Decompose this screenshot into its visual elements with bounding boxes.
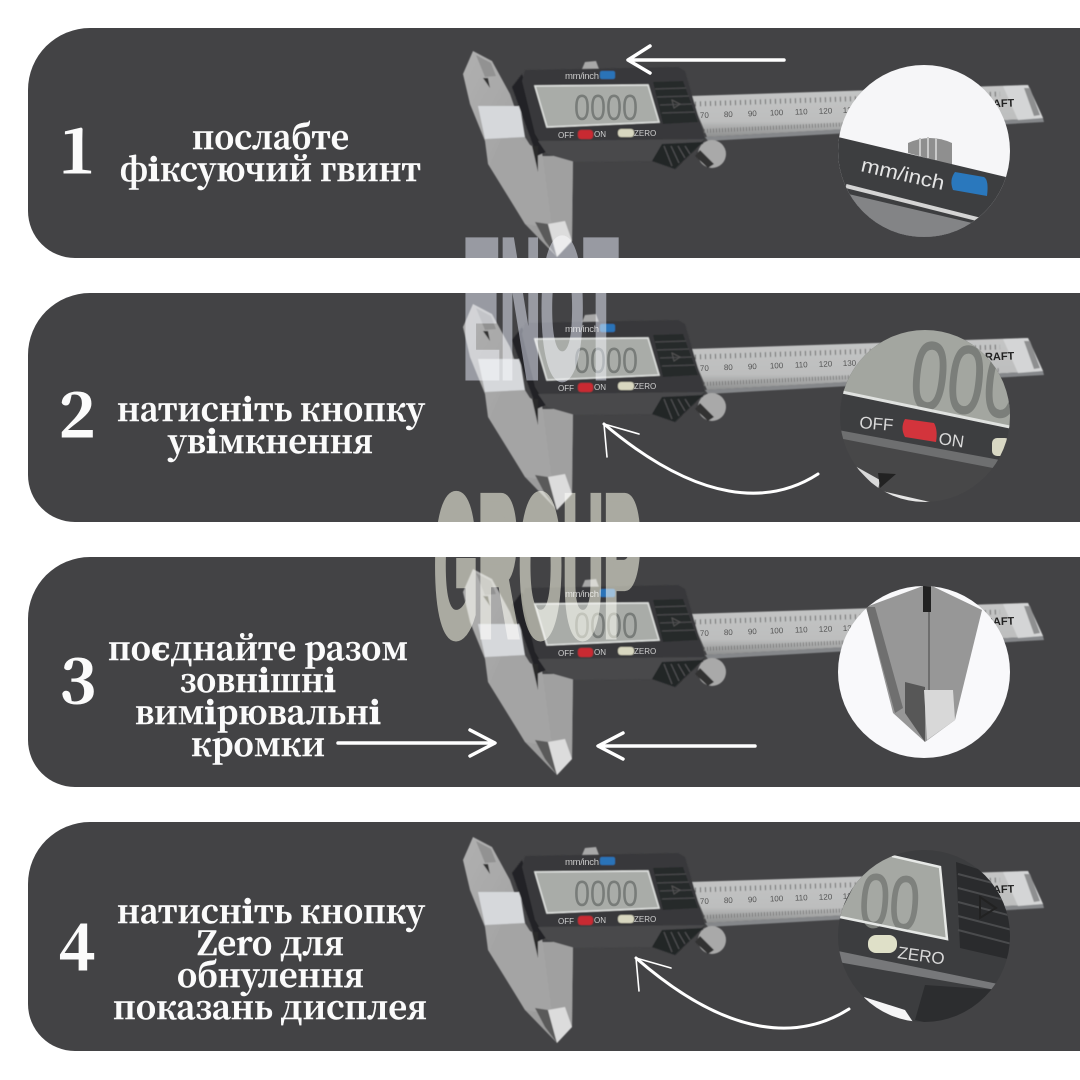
caliper photo 1: 130 xyxy=(843,106,857,115)
step 3 instruction: поєднайте разом xyxy=(108,623,408,670)
arrow pointing left to the screw xyxy=(628,46,784,73)
caliper photo 1: 110 xyxy=(795,107,808,117)
inset zoom: OFF/ON button xyxy=(841,330,1010,502)
caliper photo 4: 80 xyxy=(724,896,733,905)
caliper photo 4: mm/inch xyxy=(565,857,599,868)
caliper photo 1: RAFT xyxy=(985,97,1015,111)
caliper photo 2: 70 xyxy=(700,364,710,373)
caliper photo 3: OFF xyxy=(558,649,574,658)
step 3 instruction xyxy=(108,623,408,766)
caliper photo 4: 100 xyxy=(770,894,784,904)
caliper photo 1 xyxy=(463,51,1044,257)
step 2 instruction: увімкнення xyxy=(167,416,373,463)
caliper photo 1: 0000 xyxy=(574,87,638,128)
caliper photo 3: 80 xyxy=(724,628,733,637)
caliper photo 1: 90 xyxy=(748,109,757,118)
inset zoom: closed jaw tips xyxy=(838,586,1010,758)
step 4 instruction: Zero для xyxy=(197,918,344,965)
arrow pointing left to the jaw tips xyxy=(598,733,755,759)
step 4 instruction: показань дисплея xyxy=(113,982,427,1029)
caliper photo 2: OFF xyxy=(558,384,574,393)
caliper photo 2: ON xyxy=(594,383,606,392)
caliper photo 2 xyxy=(463,304,1044,510)
caliper photo 4: 120 xyxy=(819,892,833,902)
inset zoom: locking screw and mm/inch xyxy=(838,65,1010,237)
caliper photo 3: 90 xyxy=(748,627,757,636)
caliper photo 2: 0000 xyxy=(574,340,638,381)
step number 3: 3 xyxy=(60,632,96,721)
caliper photo 2: 120 xyxy=(819,359,833,369)
step 1 instruction: послабте xyxy=(192,112,349,159)
step 2 instruction xyxy=(117,384,426,463)
caliper photo 2: 80 xyxy=(724,363,733,372)
caliper photo 4: 110 xyxy=(795,893,808,903)
caliper photo 3: 130 xyxy=(843,624,857,633)
caliper photo 1: 70 xyxy=(700,111,710,120)
caliper photo 3: ZERO xyxy=(634,647,656,656)
inset zoom: ZERO button: 00 xyxy=(857,858,923,947)
panel 1: loosen the locking screw xyxy=(28,28,1080,260)
caliper photo 1: 100 xyxy=(770,108,784,118)
caliper photo 2: 90 xyxy=(748,362,757,371)
step number 4: 4 xyxy=(59,898,95,987)
inset zoom: OFF/ON button: ON xyxy=(937,429,965,452)
caliper photo 4: RAFT xyxy=(985,883,1015,897)
caliper photo 2: 110 xyxy=(795,360,808,370)
caliper photo 2: RAFT xyxy=(985,350,1015,364)
caliper photo 4: ON xyxy=(594,916,606,925)
caliper photo 4: 0000 xyxy=(574,873,638,914)
inset zoom: OFF/ON button: OFF xyxy=(859,413,894,435)
step 3 instruction: кромки xyxy=(191,719,325,766)
step 3 instruction: зовнішні xyxy=(180,655,336,702)
inset zoom: locking screw and mm/inch: mm/inch xyxy=(859,154,947,195)
caliper photo 4 xyxy=(463,837,1044,1043)
caliper photo 3: 70 xyxy=(700,629,710,638)
arrow from text to the jaw tips xyxy=(338,730,495,756)
caliper photo 3: 120 xyxy=(819,624,833,634)
curved arrow to the power button xyxy=(604,424,818,493)
step 4 instruction xyxy=(113,886,427,1029)
caliper photo 3: 110 xyxy=(795,625,808,635)
panel 4: press the Zero button xyxy=(28,822,1080,1051)
caliper photo 4: ZERO xyxy=(634,915,656,924)
step 1 instruction xyxy=(120,112,421,191)
panel 2: press the power button xyxy=(28,293,1080,522)
panel 3: bring measuring edges together xyxy=(28,557,1080,787)
step 1 instruction: фіксуючий гвинт xyxy=(120,144,421,191)
caliper photo 4: OFF xyxy=(558,917,574,926)
caliper photo 2: 130 xyxy=(843,359,857,368)
step number 2: 2 xyxy=(59,366,95,455)
inset zoom: OFF/ON button: 000 xyxy=(906,321,1026,439)
caliper photo 1: OFF xyxy=(558,131,574,140)
inset zoom: ZERO button xyxy=(838,850,1012,1030)
caliper photo 2: ZERO xyxy=(634,382,656,391)
step 2 instruction: натисніть кнопку xyxy=(117,384,426,431)
caliper photo 3: mm/inch xyxy=(565,589,599,600)
step number 1: 1 xyxy=(59,102,95,191)
watermark: ENOT GROUP xyxy=(434,200,641,678)
caliper photo 1: mm/inch xyxy=(565,71,599,82)
caliper photo 3 xyxy=(463,569,1044,775)
caliper photo 3: RAFT xyxy=(985,615,1015,629)
step 4 instruction: натисніть кнопку xyxy=(117,886,426,933)
caliper photo 4: 90 xyxy=(748,895,757,904)
caliper photo 3: 100 xyxy=(770,626,784,636)
caliper photo 4: 130 xyxy=(843,892,857,901)
caliper photo 3: 0000 xyxy=(574,605,638,646)
caliper photo 2: 100 xyxy=(770,361,784,371)
step 3 instruction: вимірювальні xyxy=(135,687,381,734)
caliper photo 3: ON xyxy=(594,648,606,657)
inset zoom: ZERO button: ZERO xyxy=(896,943,946,969)
step 4 instruction: обнулення xyxy=(177,950,364,997)
caliper photo 1: 80 xyxy=(724,110,733,119)
caliper photo 1: ON xyxy=(594,130,606,139)
caliper photo 2: mm/inch xyxy=(565,324,599,335)
caliper photo 1: 120 xyxy=(819,106,833,116)
caliper photo 1: ZERO xyxy=(634,129,656,138)
caliper photo 4: 70 xyxy=(700,897,710,906)
curved arrow to the Zero button xyxy=(636,958,849,1028)
text: ENOT xyxy=(463,200,618,418)
